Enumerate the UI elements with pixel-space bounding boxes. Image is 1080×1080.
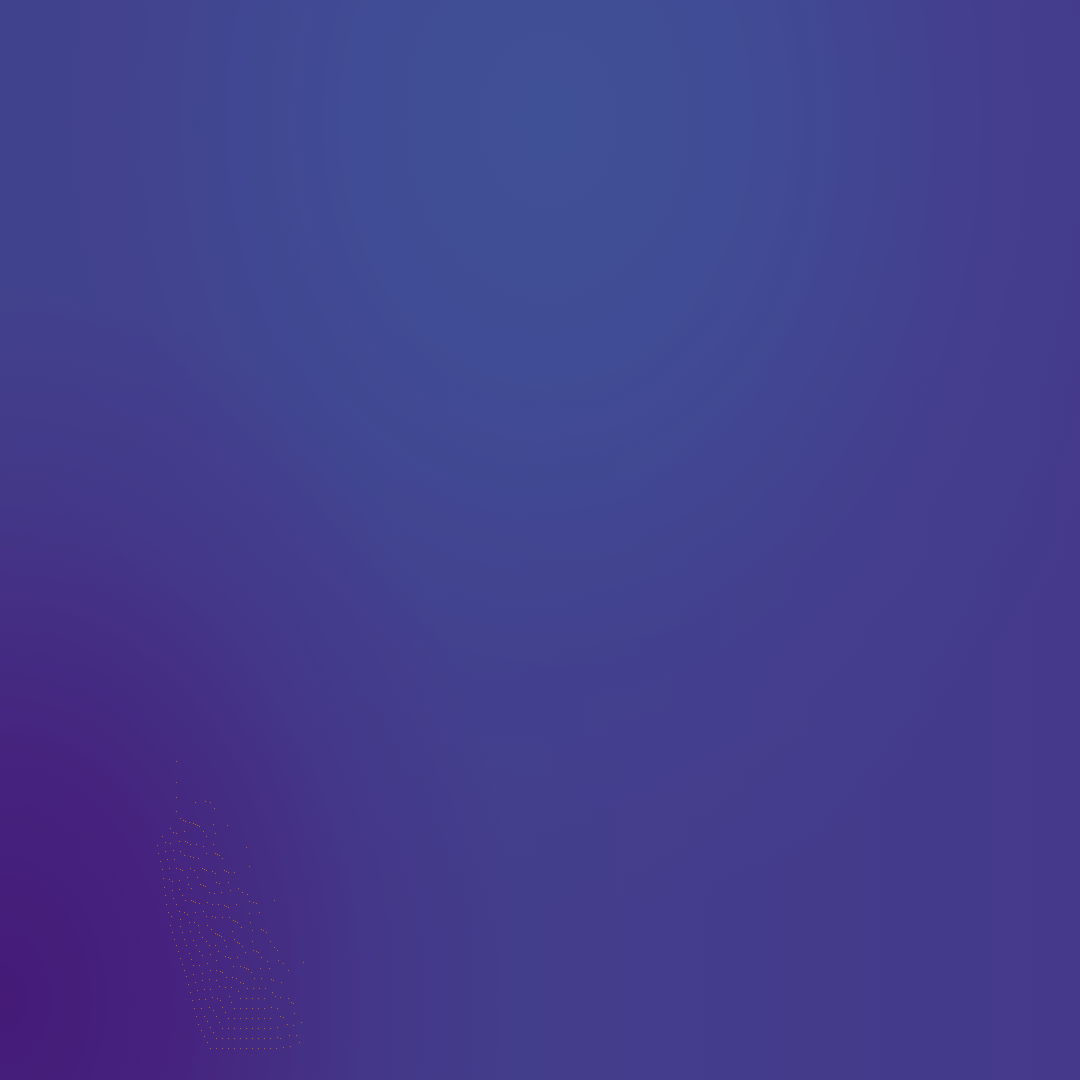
- dot figure: orange stippled shape: [157, 761, 303, 1048]
